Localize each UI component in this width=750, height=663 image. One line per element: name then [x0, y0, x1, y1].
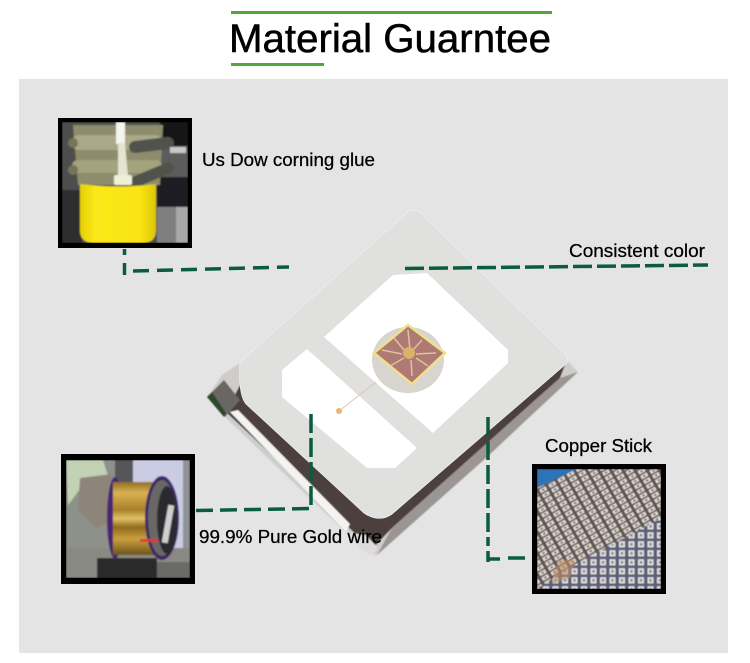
leader line: color: [405, 265, 708, 268]
large white pad: [324, 273, 508, 433]
LED die: [372, 325, 445, 393]
package top surface: [240, 210, 568, 518]
LED chip package: [207, 210, 578, 556]
bonding wire: [339, 382, 376, 411]
label: gold wire: 99.9% Pure Gold wire: [199, 527, 382, 547]
photo: copper stick: [532, 464, 666, 594]
title: Material Guarntee: [229, 17, 551, 61]
small white pad: [282, 349, 417, 468]
photo: yellow glue beaker: [58, 118, 192, 248]
leader line: gold wire: [196, 414, 311, 510]
label: glue: Us Dow corning glue: [202, 149, 375, 170]
label: copper: Copper Stick: [545, 436, 653, 456]
package base and metal edge: [207, 360, 578, 556]
photo: gold wire spool: [61, 454, 195, 584]
label: color: Consistent color: [569, 241, 705, 261]
leader line: copper: [487, 417, 525, 562]
leader line: glue: [124, 249, 289, 275]
